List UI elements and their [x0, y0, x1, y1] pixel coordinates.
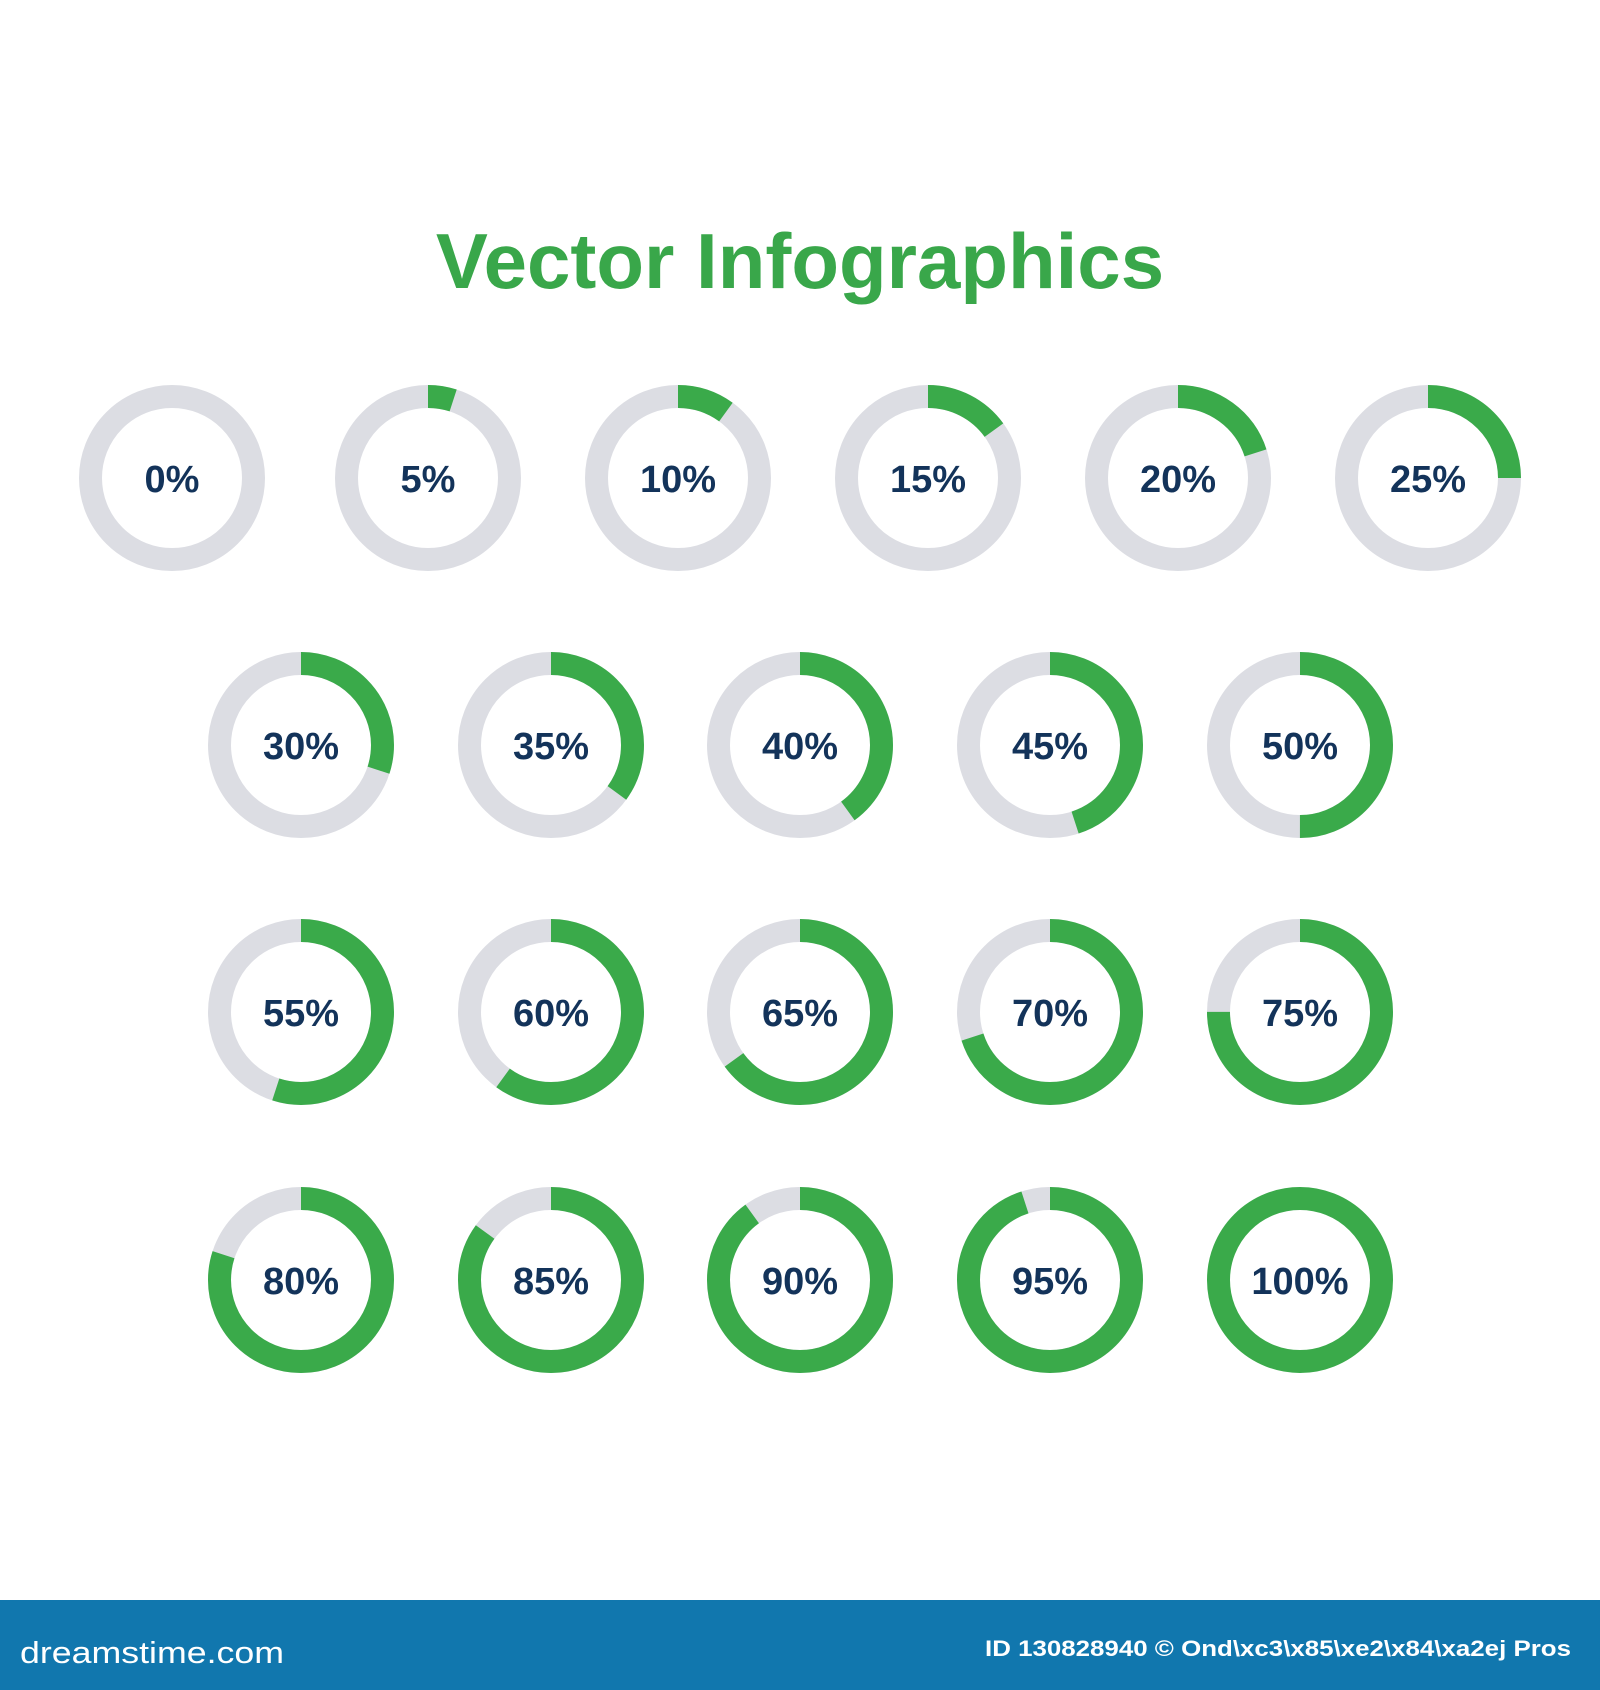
- ring 90%: [718, 1198, 882, 1362]
- ring 5%: [346, 396, 510, 560]
- ring 60%: 60%: [513, 993, 589, 1035]
- ring 90%: 90%: [762, 1261, 838, 1303]
- ring 20%: 20%: [1140, 459, 1216, 501]
- ring 55%: 55%: [263, 993, 339, 1035]
- ring 95%: [968, 1198, 1132, 1362]
- ring 95%: 95%: [1012, 1261, 1088, 1303]
- ring 10%: [596, 396, 760, 560]
- ring 75%: 75%: [1262, 993, 1338, 1035]
- ring 70%: 70%: [1012, 993, 1088, 1035]
- ring 25%: [1346, 396, 1510, 560]
- ring 15%: [846, 396, 1010, 560]
- ring 0%: [90, 396, 254, 560]
- ring 10%: 10%: [640, 459, 716, 501]
- footer id: ID 130828940 © Ond\xc3\x85\xe2\x84\xa2ej Pros: [985, 1636, 1571, 1661]
- title: Vector Infographics: [436, 217, 1164, 305]
- ring 35%: [470, 664, 632, 826]
- ring 100%: 100%: [1251, 1261, 1349, 1303]
- ring 20%: [1096, 396, 1260, 560]
- footer logo: dreamstime.com: [20, 1635, 284, 1670]
- ring 85%: 85%: [513, 1261, 589, 1303]
- ring 100%: [1218, 1198, 1382, 1362]
- ring 50%: 50%: [1262, 726, 1338, 768]
- ring 45%: 45%: [1012, 726, 1088, 768]
- ring 35%: 35%: [513, 726, 589, 768]
- ring 30%: [220, 664, 382, 826]
- ring 60%: [470, 930, 632, 1094]
- ring 5%: 5%: [401, 459, 455, 501]
- ring 30%: 30%: [263, 726, 339, 768]
- footer bar: [0, 1600, 1600, 1690]
- ring 65%: [718, 930, 882, 1094]
- ring 25%: 25%: [1390, 459, 1466, 501]
- ring 80%: [220, 1198, 382, 1362]
- ring 40%: [718, 664, 882, 826]
- ring 0%: 0%: [145, 459, 199, 501]
- ring 45%: [968, 664, 1132, 826]
- ring 55%: [220, 930, 382, 1094]
- ring 70%: [968, 930, 1132, 1094]
- ring 75%: [1218, 930, 1382, 1094]
- ring 65%: 65%: [762, 993, 838, 1035]
- ring 40%: 40%: [762, 726, 838, 768]
- ring 80%: 80%: [263, 1261, 339, 1303]
- ring 50%: [1218, 664, 1382, 826]
- ring 15%: 15%: [890, 459, 966, 501]
- ring 85%: [470, 1198, 632, 1362]
